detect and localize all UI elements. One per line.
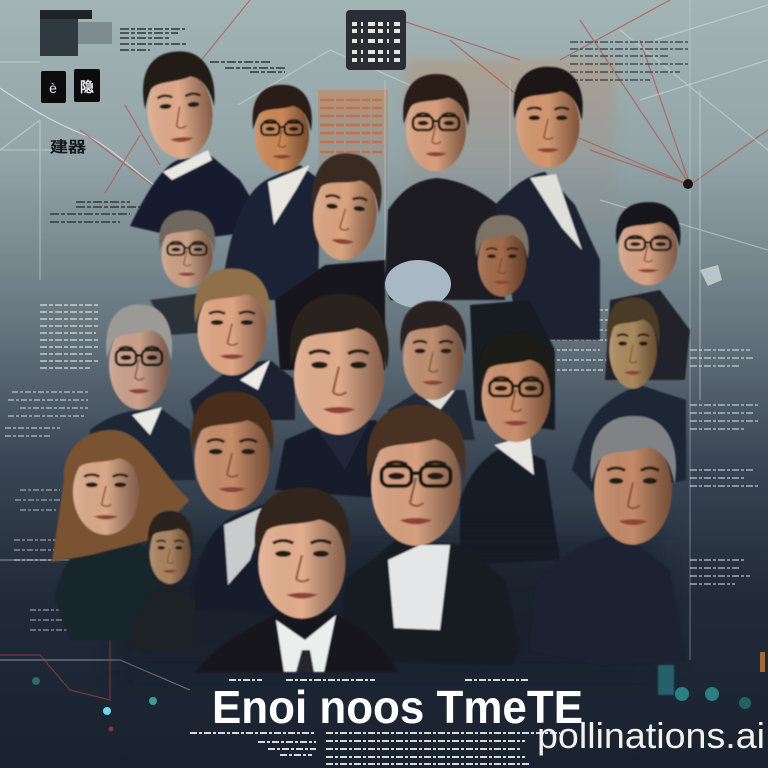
icon: black label blocks: è xyxy=(49,80,57,96)
glowing data dots xyxy=(32,652,765,732)
portrait 15 xyxy=(190,392,300,615)
panel: middle row portraits xyxy=(90,268,686,565)
portrait 4 xyxy=(495,67,600,340)
icon: pale moon sphere xyxy=(385,260,451,308)
portrait 20 xyxy=(530,416,686,665)
footer text lines xyxy=(190,680,560,764)
panel: warm right glow xyxy=(405,60,615,230)
title: Enoi noos TmeTE xyxy=(212,681,583,733)
watermark: pollinations.ai xyxy=(537,715,765,756)
panel: orange data glow xyxy=(318,90,388,200)
portrait 19 xyxy=(195,488,398,672)
portrait 16 xyxy=(52,430,190,640)
portrait 14 xyxy=(572,297,686,500)
portrait 7 xyxy=(470,215,555,430)
shadow behind front row xyxy=(120,540,660,670)
text block strokes xyxy=(5,29,760,630)
data card: top centre screen xyxy=(346,10,406,70)
portrait 18 xyxy=(340,405,520,665)
portrait 11 xyxy=(275,294,405,500)
icon: black label blocks xyxy=(41,69,100,103)
panel: front row portraits xyxy=(52,392,686,672)
icon: pale polygon marker xyxy=(700,265,722,286)
portrait 3 xyxy=(385,74,505,300)
portrait 9 xyxy=(190,268,295,420)
portrait 10 xyxy=(90,305,195,480)
icon: red network node xyxy=(683,179,693,189)
portrait 13 xyxy=(460,333,560,565)
data card: top left screen xyxy=(40,10,112,56)
portrait 5 xyxy=(275,151,385,370)
portrait 6 xyxy=(150,210,240,335)
portrait 17 xyxy=(130,511,195,650)
icon: black label blocks: 隐 xyxy=(80,79,94,95)
small label: 建器 xyxy=(50,138,87,156)
panel: back row portraits xyxy=(130,49,690,430)
portrait 2 xyxy=(222,85,320,300)
portrait 1 xyxy=(130,49,252,240)
portrait 8 xyxy=(605,202,690,380)
portrait 12 xyxy=(388,301,475,440)
